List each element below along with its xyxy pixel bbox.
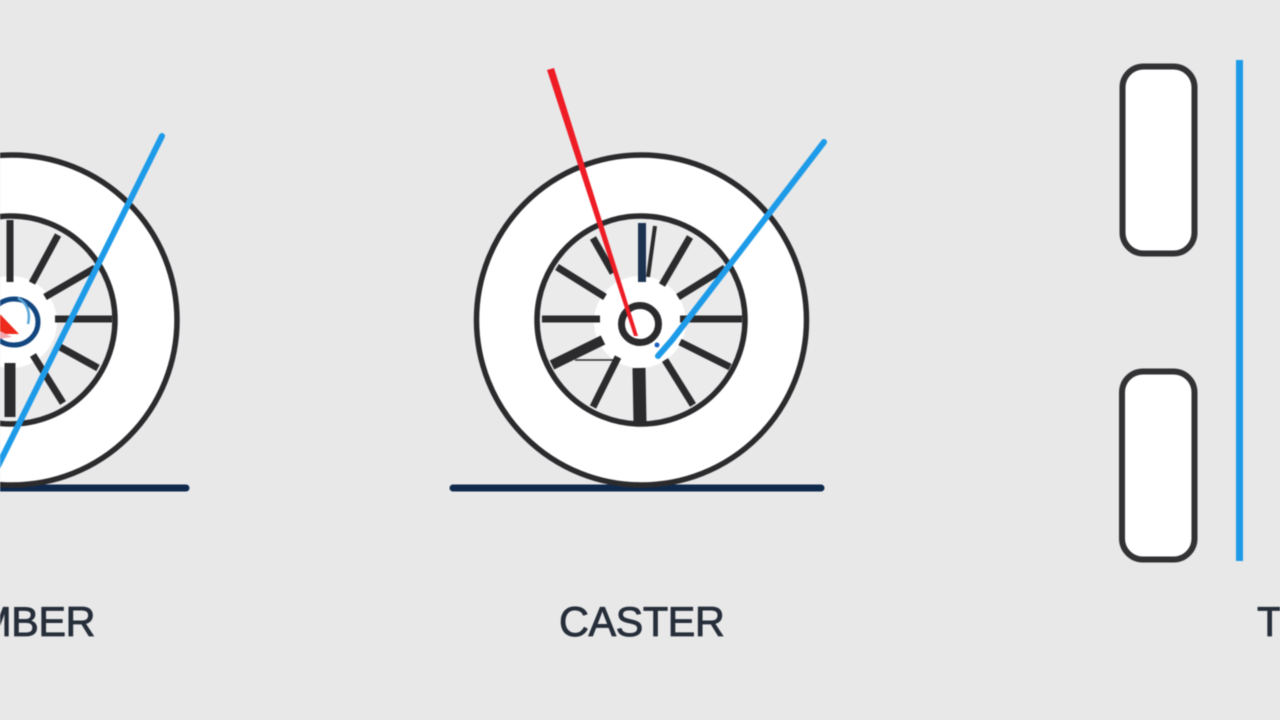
caster blue dot xyxy=(654,342,660,348)
toe rear tire xyxy=(1122,372,1194,560)
caster spokes xyxy=(542,223,742,423)
toe front tire xyxy=(1122,66,1194,254)
camber hub marker xyxy=(0,298,38,345)
caster red angle line xyxy=(547,68,638,336)
camber tire xyxy=(0,155,177,485)
caster blue angle line xyxy=(658,142,824,356)
camber ground line xyxy=(0,484,186,492)
panel: camber diagram xyxy=(0,136,186,488)
caster axle ring xyxy=(622,306,658,342)
label: caster: CASTER xyxy=(559,598,724,645)
caster rim xyxy=(537,216,745,424)
caster ground line xyxy=(453,484,821,492)
camber hub xyxy=(0,276,57,368)
camber spokes xyxy=(10,220,112,417)
caster tire xyxy=(476,155,806,485)
camber angle line xyxy=(0,136,162,478)
camber rim xyxy=(0,216,115,424)
panel: toe diagram xyxy=(1122,60,1240,561)
caster hub xyxy=(594,276,686,368)
panel: caster diagram xyxy=(453,68,824,488)
toe reference line xyxy=(1236,60,1243,561)
